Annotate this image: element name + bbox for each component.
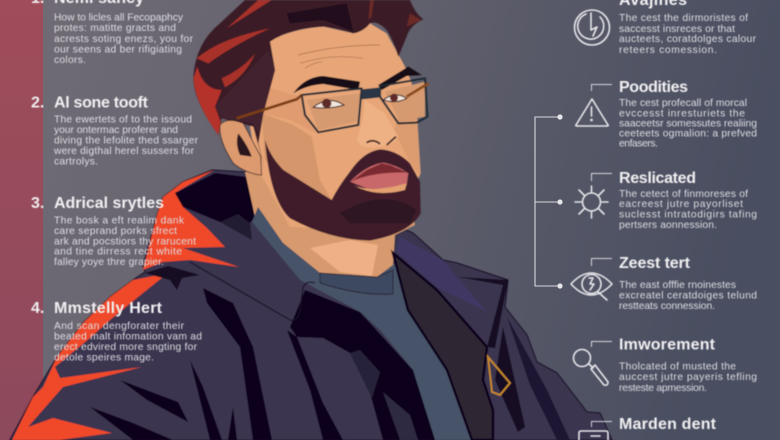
- item: Imworement: auccest jutre payeris tefling: [619, 372, 757, 383]
- item: Avajines: [574, 0, 757, 56]
- item: Marden dent: Marden dent: [619, 416, 717, 433]
- eyebrows: [293, 76, 360, 93]
- item: Poodities: evccesst inresturiets the: [619, 108, 745, 120]
- tip 4: [31, 300, 202, 364]
- illustration: man in jacket: [10, 0, 612, 440]
- icon: magnifier: [574, 350, 608, 385]
- glasses: [302, 78, 427, 132]
- eye shadows: [307, 82, 425, 130]
- tip 3: Adrical srytles: [54, 195, 164, 212]
- tip 4: Mmstelly Hert: [54, 300, 163, 317]
- tip 2: your ontermac proferer and: [54, 125, 178, 136]
- item: Poodities: Poodities: [619, 79, 688, 96]
- red shoulder streaks: [12, 273, 168, 440]
- icon: warning triangle: [576, 99, 608, 126]
- item: Poodities: enfasers.: [619, 138, 658, 150]
- hair and sideburn: [193, 0, 423, 170]
- item: Zeest tert: excreatel ceratdoiges telund: [619, 290, 757, 302]
- tip 3: care seprand porks sfrect: [54, 226, 177, 237]
- connector lines: [535, 114, 563, 289]
- nose: [357, 100, 398, 147]
- right column: items: [571, 0, 757, 440]
- tip 1: protes: matitte gracts and: [54, 23, 176, 34]
- t-shirt: [252, 207, 472, 440]
- item: Reslicated: eacreest jutre payorliset: [619, 199, 743, 210]
- icon: sun: [575, 186, 608, 218]
- item: Zeest tert: Zeest tert: [619, 255, 691, 272]
- item: Imworement: resteste apmession.: [619, 383, 707, 394]
- tip 1: How to licles all Fecopaphcy: [54, 12, 184, 24]
- item: Zeest tert: [571, 255, 757, 312]
- tip 1: colors.: [54, 55, 86, 66]
- item: Zeest tert: The east offfie rnoinestes: [619, 280, 736, 291]
- tip 2: Al sone tooft: [54, 94, 149, 112]
- tip 4: 4.: [31, 300, 44, 317]
- cheek shadow: [262, 113, 332, 200]
- item: Reslicated: pertsers aonnession.: [619, 220, 717, 231]
- jacket right panel: [393, 253, 493, 440]
- item: Reslicated: [575, 170, 757, 231]
- tip 4: And scan dengforater their: [54, 321, 185, 332]
- tip 4: beated malt infomation vam ad: [54, 332, 202, 342]
- forehead wrinkles: [298, 45, 380, 68]
- icon: document: [579, 431, 608, 440]
- item: Avajines: aucteets, coratdolges calour: [619, 34, 757, 45]
- collar fold: [190, 262, 315, 320]
- tip 3: [31, 195, 196, 268]
- item: Reslicated: Reslicated: [619, 170, 696, 187]
- head: [193, 0, 428, 241]
- item: Poodities: [576, 79, 757, 150]
- beard: [265, 140, 421, 241]
- tip 1: acrests soting enezs, you for: [54, 34, 194, 45]
- icon: power dial: [574, 10, 610, 45]
- tip 3: and tine dirress rect white: [54, 246, 182, 258]
- item: Poodities: saaceetsr somessutes realiing: [619, 118, 757, 130]
- icon: eye with magnifier: [571, 273, 612, 300]
- tip 2: diving the lefolite thed ssarger: [54, 136, 199, 146]
- face skin: [250, 23, 421, 233]
- hood interior: [175, 173, 255, 223]
- tip 2: [31, 94, 199, 168]
- red hood lining: [143, 170, 239, 270]
- tip 2: The ewertets of to the issoud: [54, 114, 192, 126]
- item: Reslicated: suclesst intratodigirs tafing: [619, 210, 757, 220]
- item: Marden dent: [579, 416, 717, 440]
- item: Avajines: reteers comession.: [619, 45, 717, 56]
- item: Avajines: The cest the dirmoristes of: [619, 13, 748, 24]
- zipper pull: [488, 357, 510, 395]
- tip 3: The bosk a eft realim dank: [54, 216, 185, 226]
- tip 3: ark and pocstiors thy rarucent: [54, 236, 196, 248]
- tip 3: 3.: [31, 195, 44, 212]
- mouth: [350, 163, 408, 189]
- item: Poodities: The cest profecall of morcal: [619, 98, 747, 109]
- item: Imworement: Tholcated of musted the: [619, 362, 736, 372]
- jacket folds: [290, 290, 435, 440]
- tip 2: 2.: [31, 94, 44, 112]
- neck: [245, 170, 415, 277]
- item: Avajines: saccesst insreces or that: [619, 24, 735, 35]
- tip 2: cartrolys.: [54, 156, 98, 168]
- tip 4: detole speires mage.: [54, 352, 154, 364]
- tip 1: our seens ad ber rifigiating: [54, 44, 182, 56]
- item: Imworement: [574, 336, 757, 394]
- jacket and torso: [10, 170, 612, 440]
- item: Reslicated: The cetect of finmoreses of: [619, 189, 748, 200]
- tip 4: erect edvired more sngting for: [54, 342, 198, 353]
- item: Imworement: Imworement: [619, 336, 716, 354]
- eyes: [313, 101, 344, 108]
- tip 2: were digthal herel sussers for: [53, 146, 195, 157]
- collar band: [320, 270, 393, 294]
- ear: [220, 120, 262, 175]
- tip 3: falley yoye thre grapier.: [54, 257, 164, 268]
- item: Poodities: ceeteets ogmalion: a prefved: [619, 128, 757, 140]
- left column: numbered tips: [31, 0, 202, 364]
- item: Zeest tert: restteats connession.: [619, 301, 715, 312]
- tip 1: [31, 0, 194, 66]
